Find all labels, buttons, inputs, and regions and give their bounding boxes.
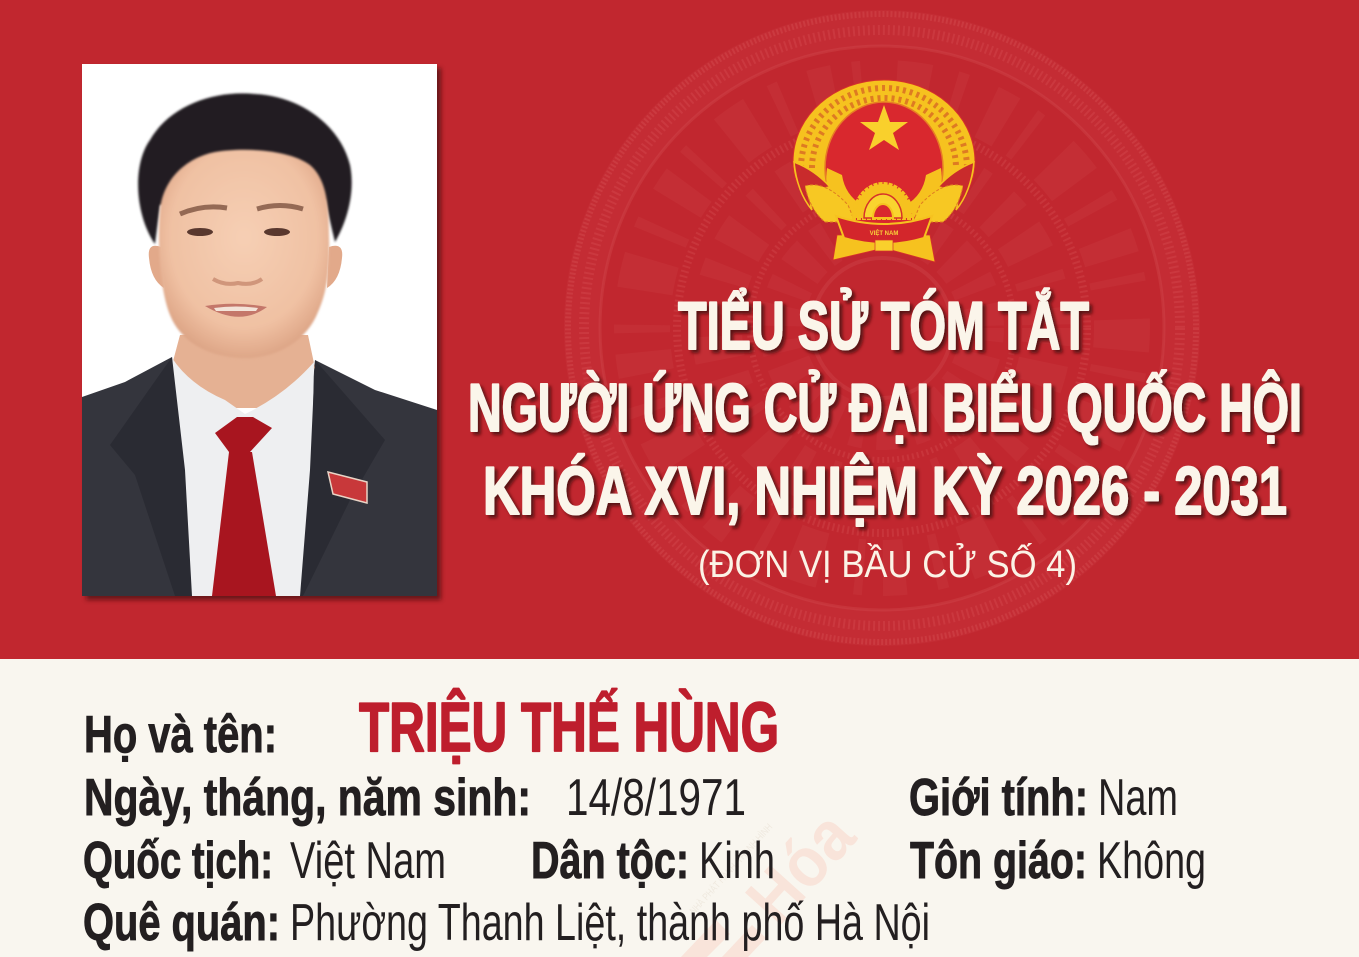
nose bbox=[213, 279, 262, 284]
hair bbox=[138, 93, 352, 244]
title bbox=[468, 287, 1302, 529]
title: TIỂU SỬ TÓM TẮT bbox=[678, 287, 1089, 364]
red tie bbox=[212, 417, 276, 596]
white shirt bbox=[172, 358, 314, 596]
emblem red interior bbox=[825, 102, 943, 234]
subtitle: (ĐƠN VỊ BẦU CỬ SỐ 4) bbox=[698, 541, 1077, 586]
eyes bbox=[187, 228, 213, 236]
candidate details bbox=[83, 687, 1206, 952]
lapel shading bbox=[110, 357, 385, 596]
emblem wreath grain texture bbox=[801, 88, 967, 168]
nationality, ethnicity and religion row: Kinh bbox=[699, 832, 775, 890]
emblem star bbox=[860, 105, 908, 150]
watermark: NHÀ PHÁT HÀNH, THANH HÌNH bbox=[687, 821, 775, 917]
header red panel bbox=[0, 0, 1359, 659]
birth date and gender row: Giới tính: bbox=[909, 769, 1088, 827]
neck bbox=[172, 335, 315, 408]
nationality, ethnicity and religion row bbox=[83, 832, 1206, 890]
nationality, ethnicity and religion row: Dân tộc: bbox=[531, 832, 689, 890]
nationality, ethnicity and religion row: Quốc tịch: bbox=[83, 832, 273, 890]
national emblem bbox=[793, 80, 975, 262]
birth date and gender row: 14/8/1971 bbox=[566, 769, 746, 827]
emblem gear bbox=[854, 184, 912, 218]
nationality, ethnicity and religion row: Việt Nam bbox=[290, 832, 446, 890]
info panel background bbox=[0, 659, 1359, 957]
eyebrows bbox=[180, 206, 303, 214]
mouth bbox=[205, 304, 267, 317]
emblem inner wheat bbox=[826, 168, 942, 218]
watermark: Hóa bbox=[731, 796, 870, 938]
emblem red side ribbons bbox=[794, 162, 974, 210]
portrait photo bbox=[82, 64, 441, 600]
hometown row bbox=[83, 894, 930, 952]
nationality, ethnicity and religion row: Tôn giáo: bbox=[910, 832, 1087, 890]
ears bbox=[149, 246, 342, 288]
full name row: TRIỆU THẾ HÙNG bbox=[359, 687, 779, 766]
emblem banner bbox=[836, 216, 932, 244]
hometown row: Quê quán: bbox=[83, 894, 280, 952]
emblem center bars bbox=[875, 240, 893, 251]
birth date and gender row: Nam bbox=[1098, 769, 1178, 827]
birth date and gender row bbox=[84, 769, 1178, 827]
full name row: Họ và tên: bbox=[84, 706, 277, 764]
hometown row: Phường Thanh Liệt, thành phố Hà Nội bbox=[290, 894, 930, 952]
national assembly pin bbox=[328, 472, 367, 503]
nationality, ethnicity and religion row: Không bbox=[1097, 832, 1206, 890]
emblem lower wheat bbox=[805, 185, 963, 222]
emblem caption: VIỆT NAM bbox=[870, 229, 898, 237]
emblem base bbox=[833, 235, 935, 262]
face bbox=[159, 150, 329, 358]
watermark bbox=[681, 796, 870, 957]
birth date and gender row: Ngày, tháng, năm sinh: bbox=[84, 769, 531, 827]
emblem wreath bbox=[793, 80, 975, 222]
bronze drum background pattern bbox=[568, 14, 1196, 642]
full name row bbox=[84, 687, 779, 766]
suit jacket bbox=[82, 357, 437, 596]
